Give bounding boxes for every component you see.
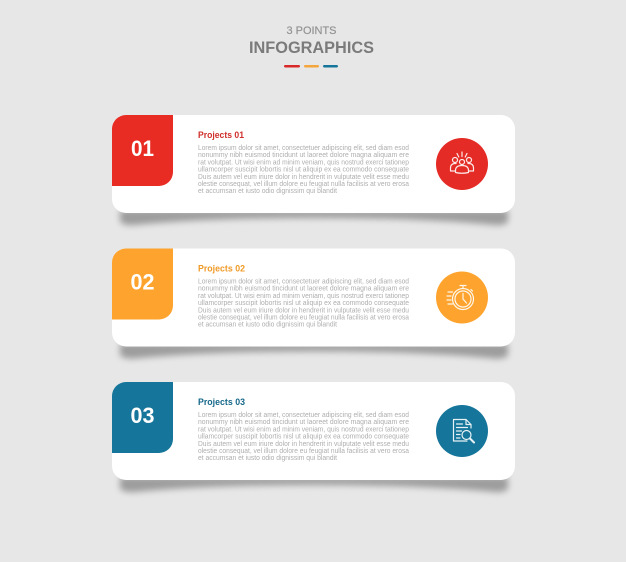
body text: et accumsan et iusto odio dignissim qui blandit [198, 322, 337, 329]
body text: ullamcorper suscipit lobortis nisl ut aliquip ex ea commodo consequate [198, 300, 409, 307]
panel: project 02 [112, 248, 515, 359]
body text: et accumsan et iusto odio dignissim qui blandit [198, 455, 337, 462]
colour key dashes [284, 65, 338, 68]
body text: rat volutpat. Ut wisi enim ad minim veniam, quis nostrud exerci tationep [198, 426, 409, 433]
body text [198, 145, 409, 195]
heading: title block [249, 25, 374, 68]
number tab [112, 382, 173, 453]
number: 03 [130, 403, 154, 428]
body text: nonummy nibh euismod tincidunt ut laoreet dolore magna aliquam ere [198, 152, 409, 159]
icon: team [436, 138, 488, 190]
title: INFOGRAPHICS [249, 38, 374, 57]
body text: Duis autem vel eum iriure dolor in hendrerit in vulputate velit esse medu [198, 174, 409, 181]
body text: Lorem ipsum dolor sit amet, consectetuer adipiscing elit, sed diam esod [198, 145, 409, 152]
number: 01 [131, 136, 154, 161]
body text: Duis autem vel eum iriure dolor in hendrerit in vulputate velit esse medu [198, 307, 409, 314]
heading: Projects 02 [198, 264, 245, 274]
subtitle: 3 POINTS [286, 25, 336, 37]
card shadow [120, 210, 508, 225]
body text: Lorem ipsum dolor sit amet, consectetuer adipiscing elit, sed diam esod [198, 412, 409, 419]
body text: rat volutpat. Ut wisi enim ad minim veniam, quis nostrud exerci tationep [198, 293, 409, 300]
card [112, 248, 515, 346]
panel: project 01 [112, 115, 515, 225]
panel: project 03 [112, 382, 515, 492]
number tab [112, 115, 173, 186]
body text: rat volutpat. Ut wisi enim ad minim veniam, quis nostrud exerci tationep [198, 159, 409, 166]
card shadow [120, 477, 508, 492]
heading: Projects 03 [198, 397, 245, 408]
body text: olestie consequat, vel illum dolore eu feugiat nulla facilisis at vero erosa [198, 448, 409, 455]
body text: Duis autem vel eum iriure dolor in hendrerit in vulputate velit esse medu [198, 441, 409, 448]
card [112, 115, 515, 213]
body text: olestie consequat, vel illum dolore eu feugiat nulla facilisis at vero erosa [198, 314, 409, 322]
body text: ullamcorper suscipit lobortis nisl ut aliquip ex ea commodo consequate [198, 167, 409, 174]
icon: stopwatch [436, 272, 488, 324]
heading: Projects 01 [198, 130, 245, 141]
number tab [112, 248, 173, 320]
card shadow [120, 344, 508, 359]
body text: nonummy nibh euismod tincidunt ut laoreet dolore magna aliquam ere [198, 419, 409, 426]
body text: olestie consequat, vel illum dolore eu feugiat nulla facilisis at vero erosa [198, 181, 409, 188]
body text: et accumsan et iusto odio dignissim qui blandit [198, 188, 337, 195]
body text: ullamcorper suscipit lobortis nisl ut aliquip ex ea commodo consequate [198, 434, 409, 441]
body text: nonummy nibh euismod tincidunt ut laoreet dolore magna aliquam ere [198, 286, 409, 293]
body text [198, 412, 409, 462]
card [112, 382, 515, 480]
body text [198, 278, 409, 329]
number: 02 [130, 270, 154, 294]
icon: document search [436, 405, 488, 457]
body text: Lorem ipsum dolor sit amet, consectetuer adipiscing elit, sed diam esod [198, 278, 409, 286]
